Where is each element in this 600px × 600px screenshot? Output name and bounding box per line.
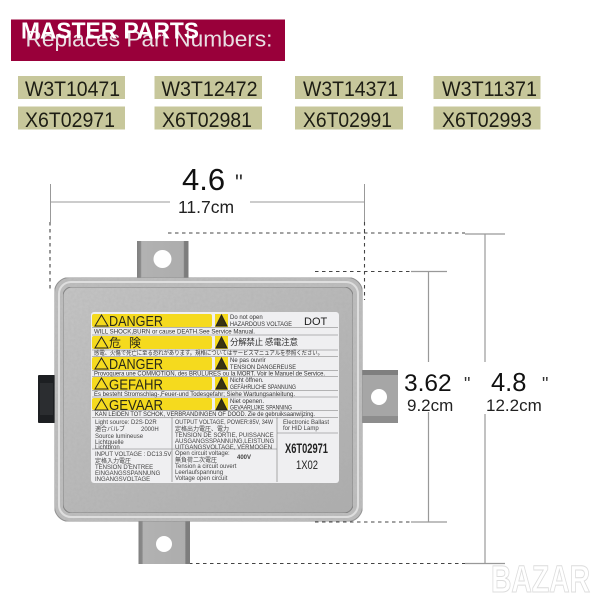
- part number grid: X6T02981: [162, 109, 252, 132]
- specification table: Light source: D2S·D2R: [95, 420, 157, 426]
- title banner: [11, 18, 285, 61]
- specification table: 定格入力電圧: [95, 457, 131, 465]
- part number grid: X6T02971: [25, 109, 115, 132]
- left connector: [38, 375, 55, 423]
- specification table: 1X02: [296, 460, 318, 472]
- specification table: Voltage open circuit: [175, 476, 228, 482]
- specification table: Leerlaufspannung: [175, 470, 223, 476]
- right-hand warnings: TENSION DANGEREUSE: [230, 365, 296, 371]
- part number grid: W3T14371: [303, 78, 398, 101]
- specification table: [95, 420, 329, 483]
- right-hand warnings: Ne pas ouvrir: [230, 358, 266, 364]
- height dimension: 4.8 in / 12.2 cm: [168, 234, 548, 564]
- specification table: Tension a circuit ouvert: [175, 464, 237, 470]
- right-hand warnings: [230, 315, 328, 412]
- title banner: MASTER PARTS: [21, 18, 199, 44]
- specification table: X6T02971: [285, 441, 328, 456]
- specification table: 400V: [237, 455, 251, 461]
- height dimension: 3.62 in / 9.2 cm: ": [464, 374, 470, 394]
- metal housing: [54, 278, 362, 522]
- part number grid: X6T02991: [303, 109, 392, 132]
- specification table: EINGANGSSPANNUNG: [95, 471, 161, 477]
- specification table: OUTPUT VOLTAGE, POWER:85V, 34W: [175, 420, 273, 426]
- specification table: Open circuit voltage:: [175, 451, 230, 457]
- specification table: AUSGANGSSPANNUNG,LEISTUNG: [175, 439, 275, 445]
- height dimension: 3.62 in / 9.2 cm: 9.2cm: [407, 396, 453, 415]
- warning sentences: 感電、火傷で死亡に至る恐れがあります。規格についてはサービスマニュアルを参照ください。: [94, 349, 323, 357]
- title banner: Replaces Part Numbers:: [26, 26, 272, 52]
- specification table: UITGANGSVOLTAGE, VERMOGEN: [175, 445, 272, 451]
- specification table: Lichtquelle: [95, 440, 124, 446]
- width dimension: 4.6 in / 11.7 cm: 4.6: [182, 162, 225, 197]
- height dimension: 3.62 in / 9.2 cm: [315, 272, 470, 522]
- right-hand warnings: DOT: [304, 316, 328, 328]
- right-hand warnings: GEVAARLIJKE SPANNING: [230, 406, 292, 412]
- part number grid: W3T10471: [25, 78, 120, 101]
- danger headings: GEFAHR: [109, 376, 163, 394]
- part number grid: W3T12472: [162, 78, 258, 101]
- right mounting tab: [358, 370, 398, 423]
- specification table: 適合バルブ: [95, 425, 125, 433]
- height dimension: 4.8 in / 12.2 cm: 4.8: [491, 369, 526, 397]
- specification table: 2000H: [141, 427, 159, 433]
- specification table: Lichtbron: [95, 445, 120, 451]
- width dimension: 4.6 in / 11.7 cm: ": [235, 170, 243, 195]
- danger headings: [109, 313, 163, 414]
- width dimension: 4.6 in / 11.7 cm: [50, 162, 465, 300]
- warning sentences: KAN LEIDEN TOT SCHOK, VERBRANDINGEN OF DOOD. Zie de gebruiksaanwijzing.: [95, 412, 315, 418]
- specification table: TENSION D'ENTREE: [95, 465, 153, 471]
- specification table: for HID Lamp: [283, 426, 319, 432]
- danger headings: DANGER: [109, 313, 163, 330]
- warning label: [91, 312, 339, 483]
- warning sentences: Provoquera une COMMOTION, des BRULURES ou la MORT. Voir le Manuel de Service.: [94, 372, 325, 378]
- part number grid: X6T02993: [442, 109, 532, 132]
- width dimension: 4.6 in / 11.7 cm: 11.7cm: [178, 197, 234, 217]
- part number grid: W3T11371: [442, 78, 537, 101]
- warning triangles: [95, 315, 227, 410]
- warning sentences: Es besteht Stromschlag-,Feuer-und Todesgefahr; Siehe Wartungsanleitung.: [94, 392, 295, 398]
- right-hand warnings: Do not open: [230, 315, 263, 321]
- warning sentences: [94, 330, 325, 418]
- warning sentences: WILL SHOCK,BURN or cause DEATH.See Service Manual.: [94, 330, 255, 336]
- bottom mounting tab: [138, 518, 190, 564]
- part number grid: [18, 76, 540, 132]
- right-hand warnings: Nicht öffnen.: [230, 378, 264, 384]
- height dimension: 3.62 in / 9.2 cm: 3.62: [404, 370, 452, 397]
- height dimension: 4.8 in / 12.2 cm: 12.2cm: [486, 396, 542, 415]
- ballast unit: [38, 241, 398, 564]
- specification table: INGANGSVOLTAGE: [95, 477, 150, 483]
- right-hand warnings: GEFÄHRLICHE SPANNUNG: [230, 384, 296, 391]
- height dimension: 4.8 in / 12.2 cm: ": [542, 374, 548, 394]
- specification table: TENSION DE SORTIE, PUISSANCE: [175, 433, 274, 439]
- danger headings: 危 険: [109, 336, 141, 350]
- right-hand warnings: 分解禁止 感電注意: [230, 337, 298, 347]
- specification table: Electronic Ballast: [283, 420, 329, 426]
- danger headings: DANGER: [109, 356, 163, 373]
- specification table: 定格出力電圧、電力: [175, 425, 229, 433]
- rules: [92, 328, 338, 482]
- right-hand warnings: Niet openen.: [230, 399, 264, 405]
- yellow danger rows: [92, 314, 228, 410]
- danger headings: GEVAAR: [109, 397, 163, 414]
- right-hand warnings: HAZARDOUS VOLTAGE: [230, 322, 292, 328]
- specification table: Source lumineuse: [95, 434, 144, 440]
- top mounting tab: [137, 241, 188, 279]
- specification table: INPUT VOLTAGE : DC13.5V: [95, 452, 171, 458]
- specification table: 無負荷二次電圧: [175, 456, 217, 464]
